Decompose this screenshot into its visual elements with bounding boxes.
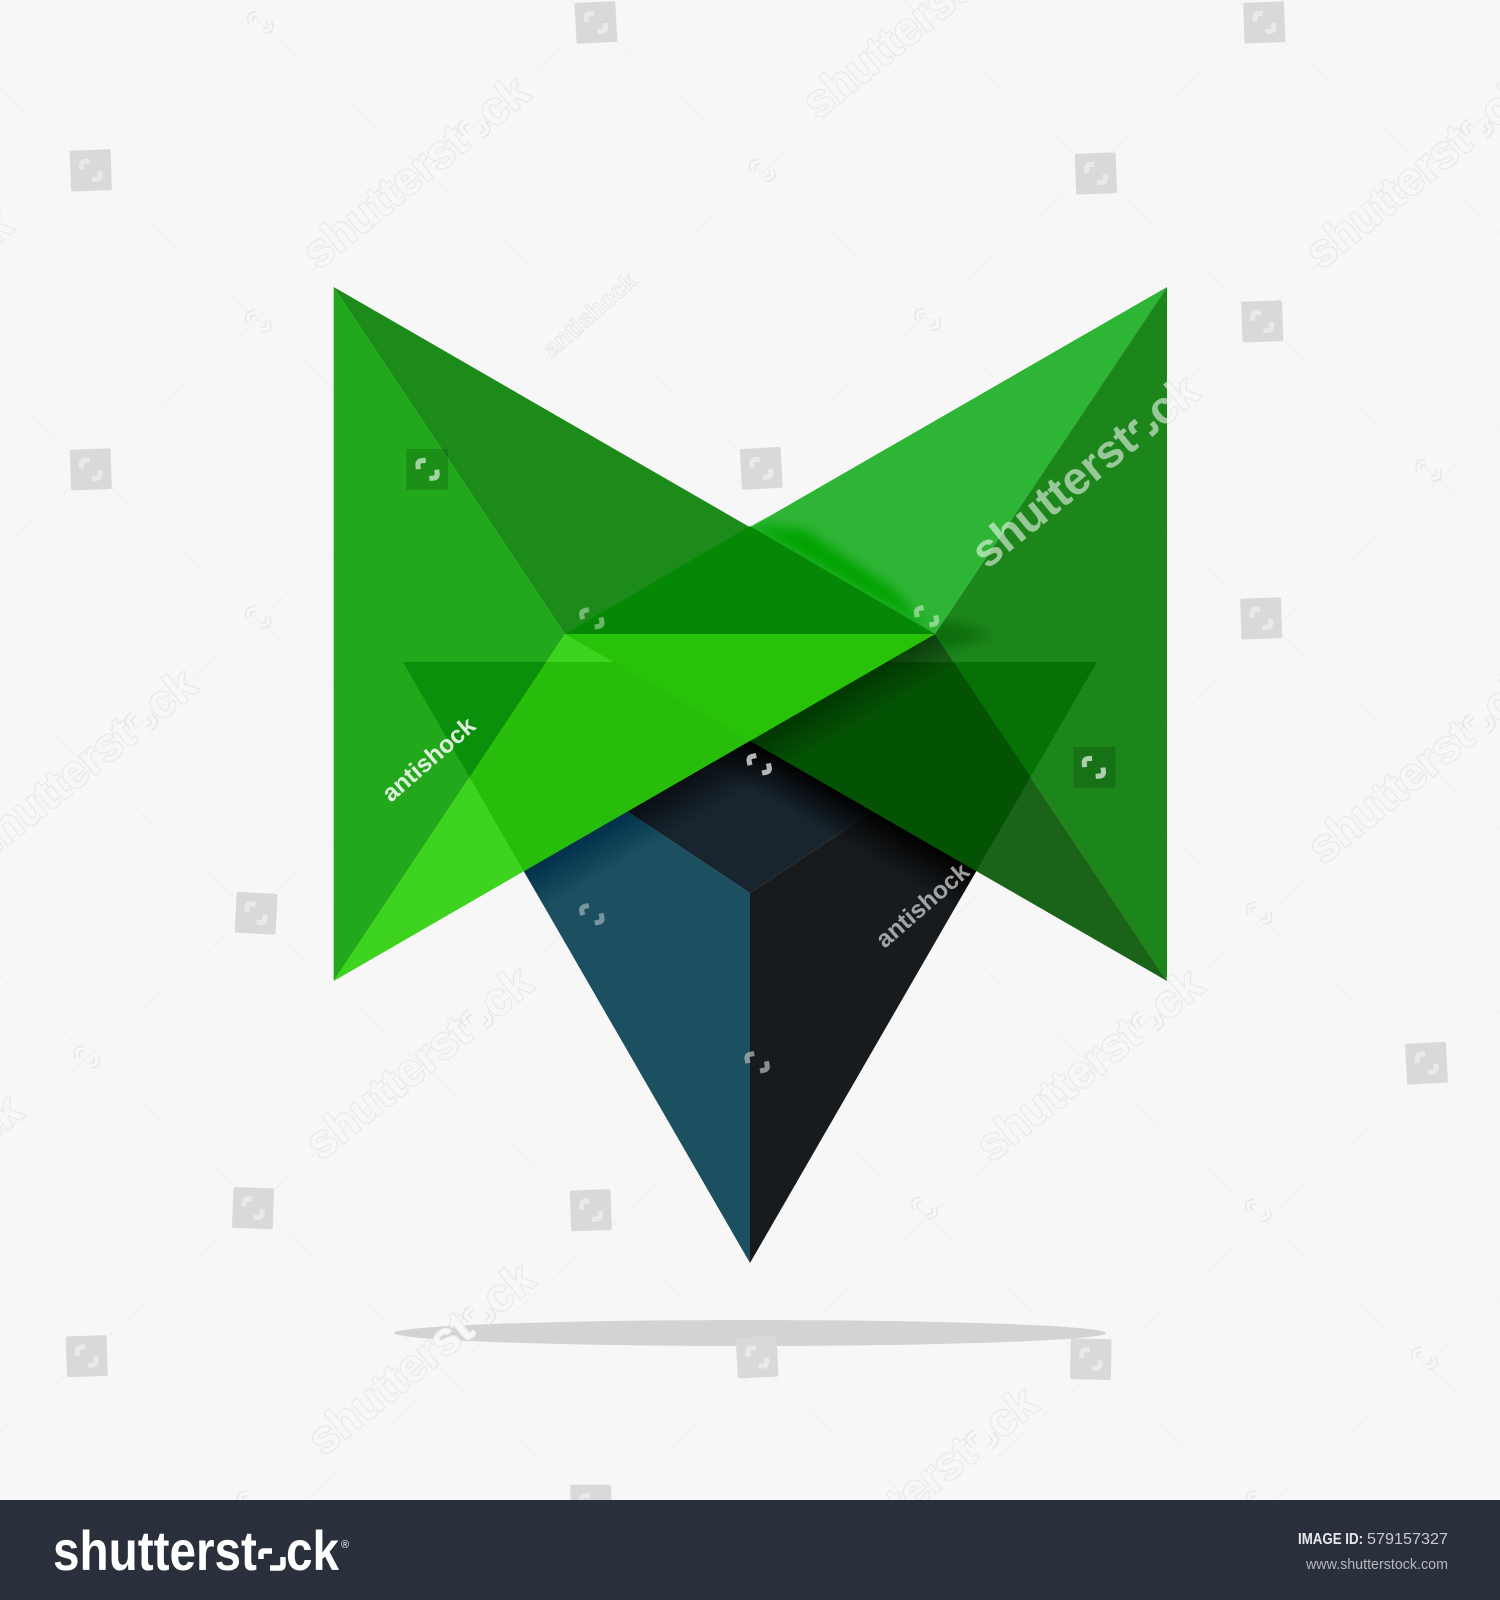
left wing: faces inside pyramid [403,662,886,872]
left wing: left face [334,287,565,981]
pyramid shadows under wings [403,662,1097,1263]
watermark: antishock labels: antishock [377,712,481,808]
right wing: right face [935,287,1167,981]
right wing [750,287,1167,981]
footer bar [0,1500,1500,1600]
footer brand wordmark: shutterstock [53,1519,340,1582]
pyramid: right black face [750,662,1097,1263]
ground shadow [394,1320,1106,1346]
registered mark: ® [341,1539,349,1551]
image id label: IMAGE ID: [1298,1531,1363,1548]
geometric logo mark [334,287,1167,1263]
overlap: lower bright diamond [565,634,935,741]
left wing [334,287,935,981]
pyramid: left teal face [403,662,750,1263]
watermark: outlined shutterstock text: shutterstock [800,1375,1047,1589]
watermark: outlined shutterstock text: shutterstock [295,955,542,1169]
shadow on upper face [745,523,930,631]
watermark: outlined text behind the right wing: shutterstock [961,364,1209,578]
watermark: shutterstock text on green [976,382,1167,566]
right wing: faces inside pyramid [750,662,1097,871]
watermark: logos on the coloured shape [406,449,1115,1073]
watermark: outlined shutterstock text: shutterstock [292,64,539,278]
shadow on right face [935,618,986,651]
left wing: lower face [334,634,935,981]
overlap: upper diamond [565,526,935,634]
left wing: upper face [334,287,935,634]
footer logo hook [261,1551,283,1568]
image id number: 579157327 [1367,1531,1448,1548]
watermark: antishock labels: antishock [538,267,643,363]
right wing: lower face [565,634,1167,981]
watermark: outlined shutterstock text: shutterstock [965,957,1213,1171]
watermark: antishock labels [377,267,975,954]
website: www.shutterstock.com [1305,1557,1448,1573]
pyramid: top dark face [403,662,1097,893]
watermark: outlined shutterstock text: shutterstock [297,1251,544,1465]
right wing: upper face [565,287,1167,634]
shadow on lower face [565,634,1167,981]
watermark: shutterstock text on green: shutterstock [961,363,1208,578]
watermark: antishock labels: antishock [871,858,975,954]
